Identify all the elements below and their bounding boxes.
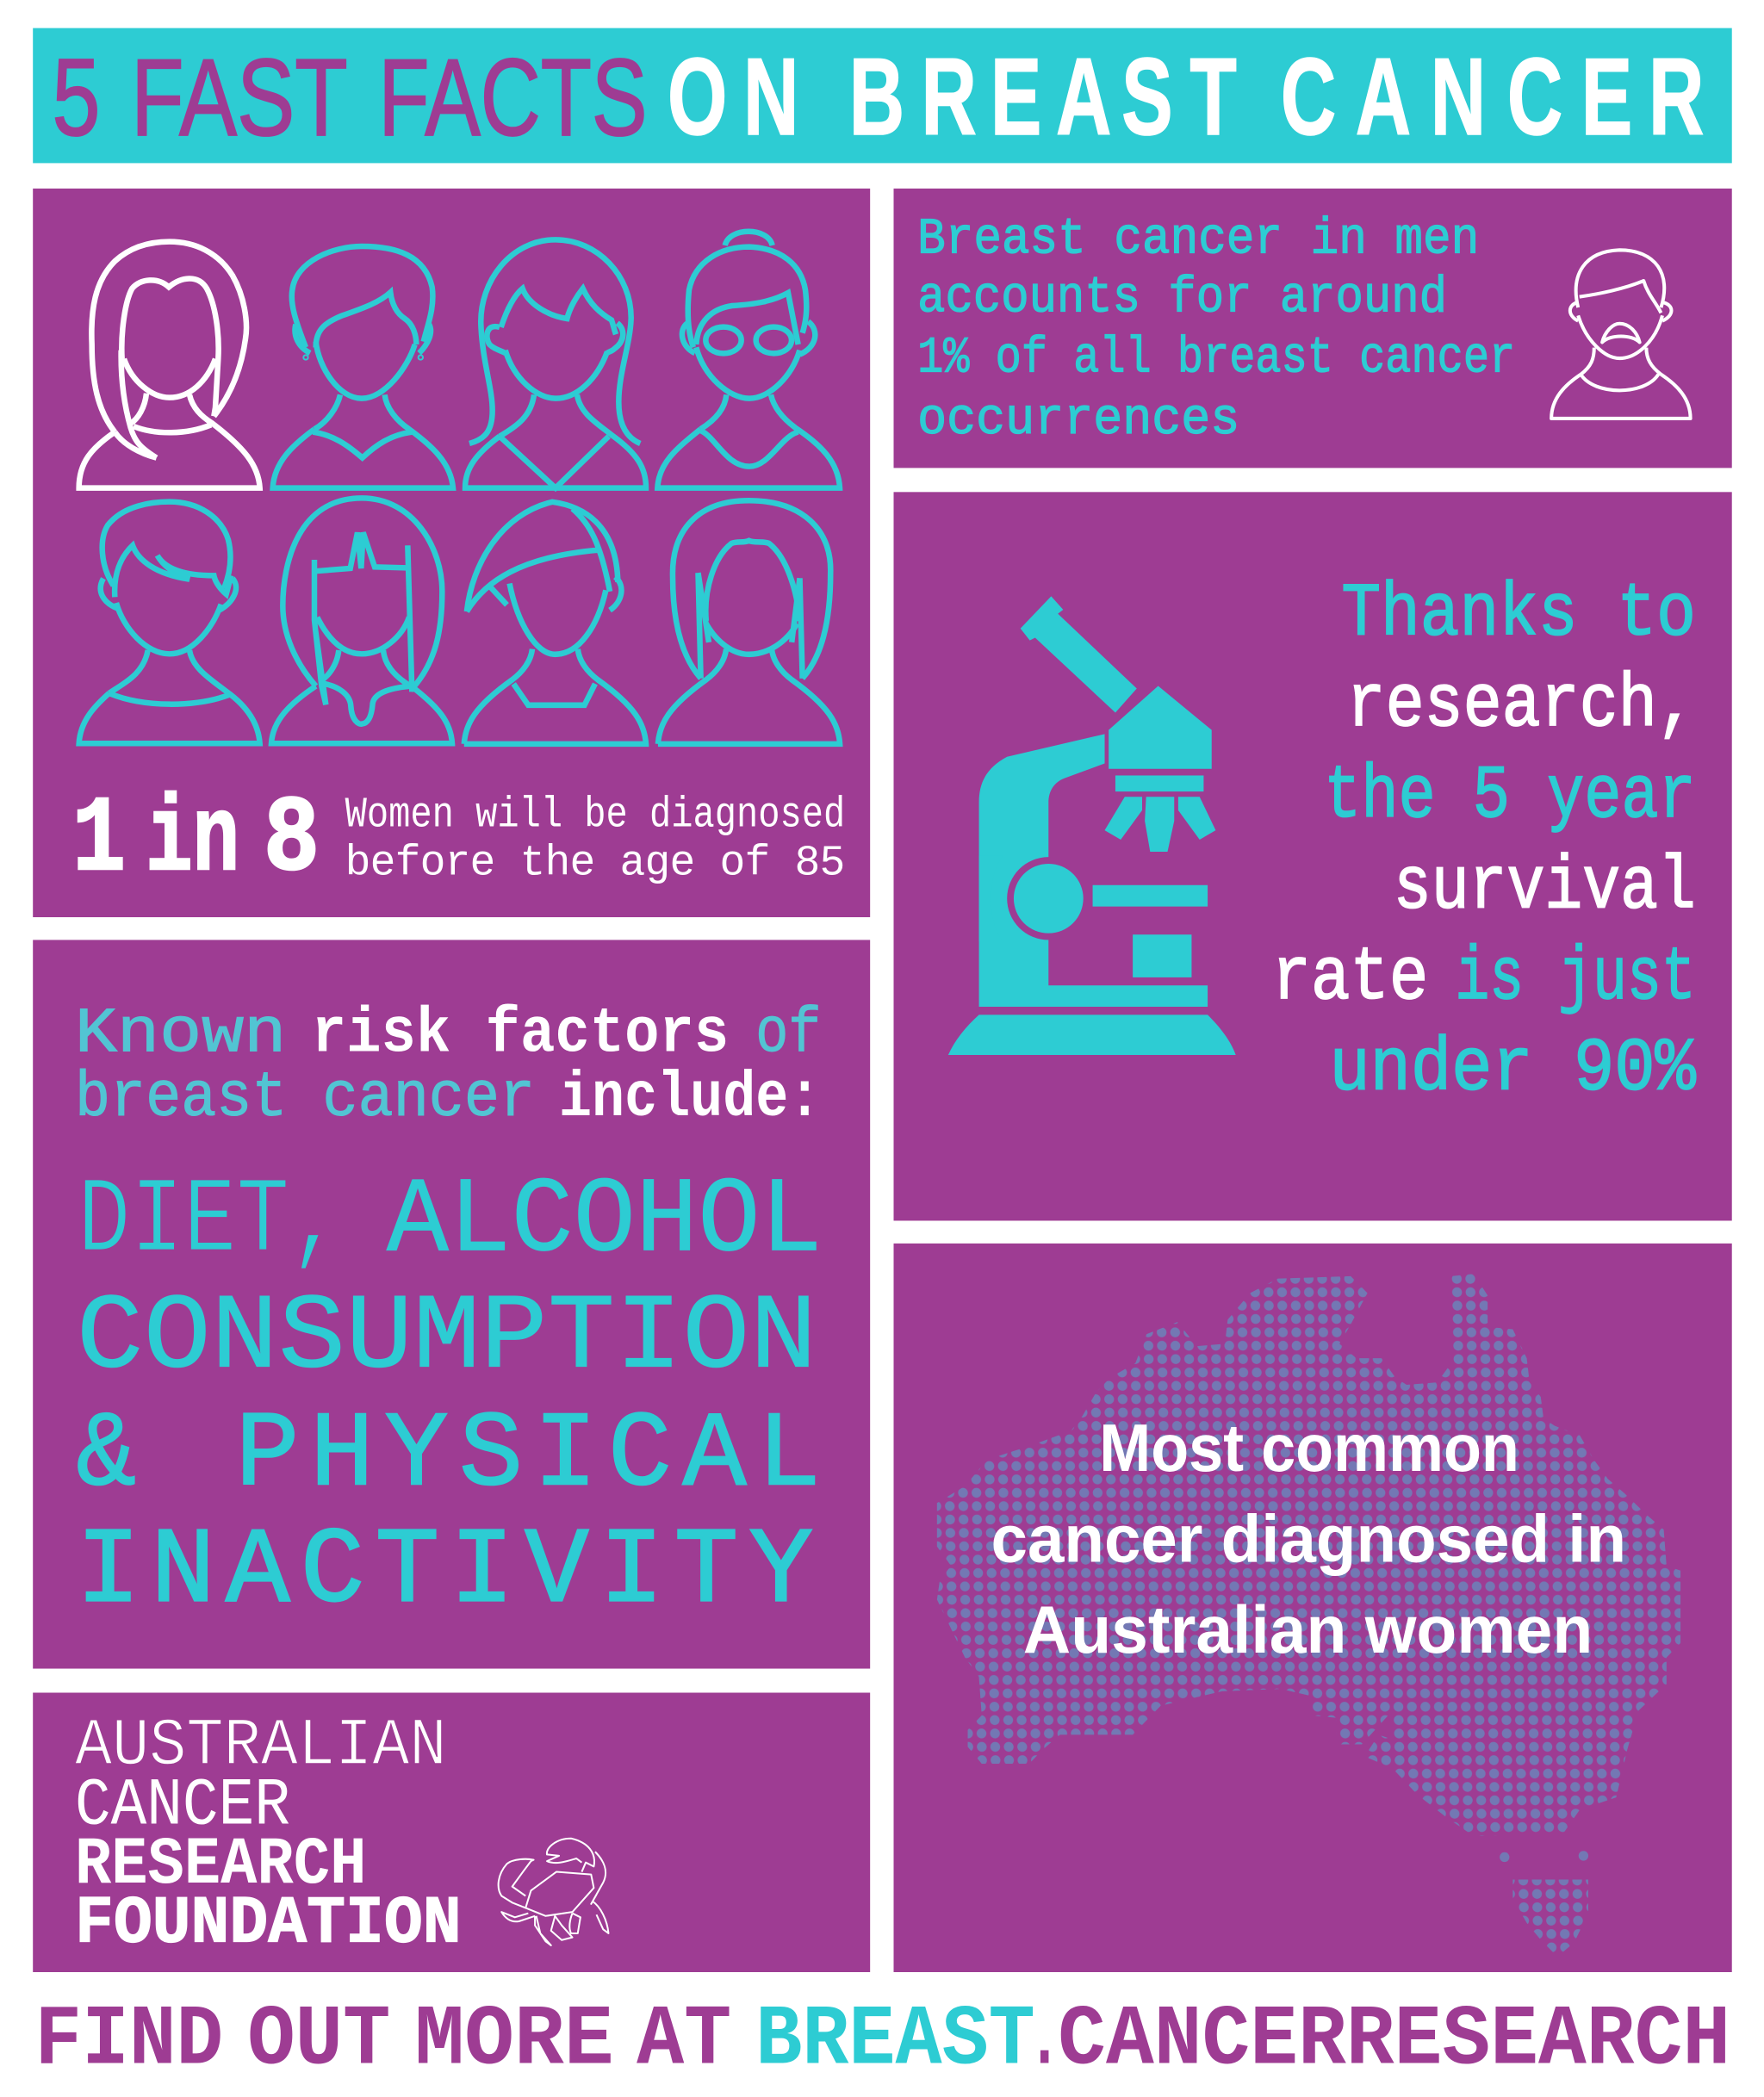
- logo wordmark: [75, 1709, 462, 1962]
- title banner: [33, 28, 1732, 163]
- title: on breast cancer: BREAST: [849, 37, 1237, 158]
- dotted map of Australia: [922, 1263, 1711, 1965]
- logo wordmark: FOUNDATION: [75, 1886, 462, 1962]
- title: 5 fast facts: FAST: [131, 36, 348, 158]
- men statistic text: Breast cancer in men: [917, 210, 1479, 268]
- survival text: survival: [1394, 846, 1696, 930]
- logo wordmark: AUSTRALIAN: [75, 1709, 447, 1784]
- footer call to action: .: [1027, 1992, 1062, 2089]
- risk factors list: &: [77, 1396, 136, 1517]
- footer call to action: CANCERRESEARCH: [1058, 1992, 1730, 2089]
- stat: 1 in 8: 8: [264, 781, 320, 902]
- risk factors intro: include:: [559, 1063, 821, 1135]
- panel: breast cancer in men: [894, 189, 1732, 468]
- risk factors list: DIET,: [78, 1163, 342, 1283]
- footer call to action: FIND: [34, 1992, 223, 2089]
- footer call to action: BREAST: [755, 1992, 1035, 2089]
- survival text: rate: [1272, 937, 1428, 1021]
- risk factors intro: risk factors: [312, 998, 729, 1070]
- risk factors intro: breast cancer: [75, 1063, 535, 1135]
- men statistic text: accounts for around: [917, 270, 1447, 327]
- caption: women diagnosed: [345, 791, 845, 887]
- panel: 1 in 8 women: [33, 189, 870, 917]
- caption: women diagnosed: Women will be diagnosed: [345, 791, 845, 839]
- stat: 1 in 8: [72, 781, 320, 902]
- title: 5 fast facts: FACTS: [378, 36, 648, 158]
- survival text: under 90%: [1329, 1028, 1697, 1113]
- men statistic text: 1% of all breast cancer: [917, 330, 1515, 388]
- men statistic text: [917, 210, 1515, 449]
- panel: foundation logo: [33, 1693, 870, 1972]
- title: 5 fast facts: [53, 36, 648, 158]
- icon: woman with bun and glasses: [657, 232, 840, 488]
- stat: 1 in 8: 1: [72, 781, 126, 902]
- title: on breast cancer: ON: [668, 37, 798, 158]
- icon: woman with short wavy hair: [273, 246, 453, 488]
- most common cancer text: Most common: [1099, 1411, 1519, 1486]
- panel: risk factors: [33, 940, 870, 1669]
- survival text: the 5 year: [1324, 755, 1696, 840]
- title: 5 fast facts: 5: [53, 36, 100, 158]
- survival text: Thanks to: [1341, 574, 1696, 658]
- icon: woman with side fringe: [464, 502, 646, 744]
- icon: man with moustache: [1551, 250, 1691, 419]
- men statistic text: occurrences: [917, 391, 1239, 449]
- footer call to action: [34, 1992, 1730, 2089]
- risk factors intro: Known: [75, 998, 286, 1070]
- icon: crab: [499, 1839, 608, 1945]
- icon: microscope: [948, 596, 1236, 1055]
- icon: woman with long layered hair: [658, 500, 840, 744]
- most common cancer text: [991, 1411, 1626, 1667]
- logo wordmark: RESEARCH: [75, 1827, 366, 1903]
- footer call to action: MORE: [414, 1992, 614, 2089]
- footer call to action: OUT: [247, 1992, 390, 2089]
- risk factors list: ALCOHOL: [387, 1163, 823, 1283]
- risk factors list: [77, 1163, 823, 1633]
- icon: woman with pixie cut: [79, 502, 260, 743]
- risk factors list: CONSUMPTION: [77, 1279, 817, 1399]
- stat: 1 in 8: in: [146, 781, 239, 902]
- caption: women diagnosed: before the age of 85: [345, 839, 845, 887]
- most common cancer text: Australian women: [1023, 1593, 1593, 1667]
- most common cancer text: cancer diagnosed in: [991, 1502, 1626, 1576]
- risk factors intro: of: [755, 998, 821, 1070]
- footer call to action: AT: [637, 1992, 731, 2089]
- risk factors intro: [75, 998, 821, 1135]
- survival text: research,: [1347, 664, 1696, 748]
- risk factors list: INACTIVITY: [77, 1512, 813, 1633]
- logo wordmark: CANCER: [75, 1769, 290, 1845]
- panel: survival rate: [894, 492, 1732, 1220]
- icon: woman highlighted in white: [79, 242, 260, 488]
- title: on breast cancer: CANCER: [1281, 37, 1704, 158]
- icon: woman with long hair and v neck: [465, 239, 646, 488]
- risk factors list: PHYSICAL: [235, 1396, 821, 1517]
- panel: australian women: [894, 1244, 1732, 1972]
- survival text: [1272, 574, 1697, 1113]
- icon: woman with straight bob: [271, 498, 452, 743]
- survival text: is just: [1455, 937, 1696, 1021]
